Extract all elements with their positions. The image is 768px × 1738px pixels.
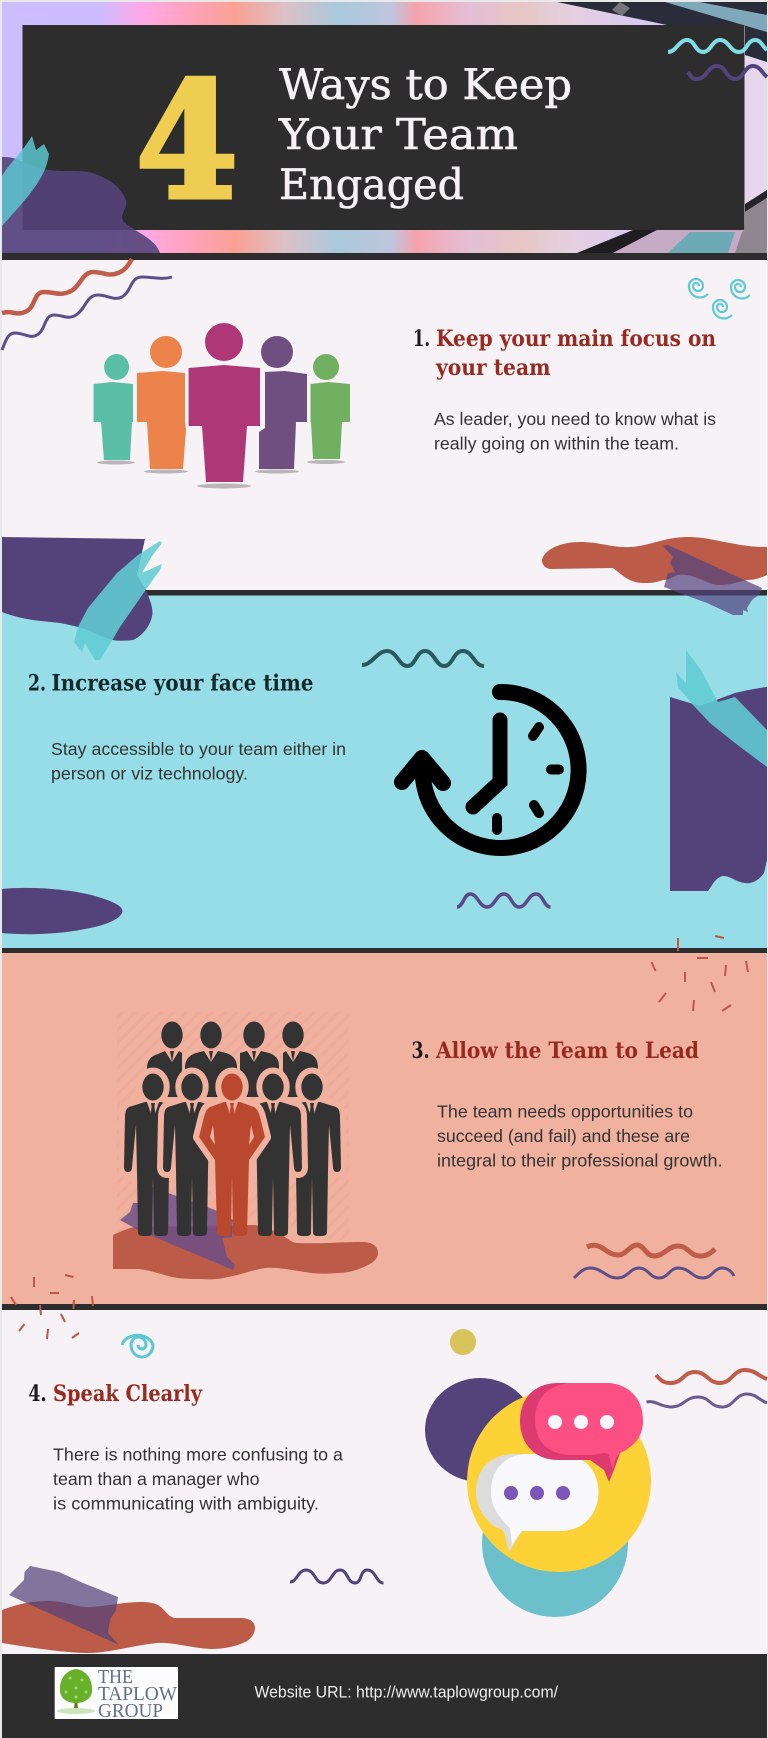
panel: header photo strip: [2, 2, 767, 253]
wave: section 4 purple: [290, 1570, 384, 1583]
bubble: white: [476, 1454, 598, 1552]
front man 4: [244, 1074, 302, 1236]
heading: step 1: 1.: [413, 326, 430, 352]
logo text: GROUP: [98, 1700, 163, 1722]
brush: purple across sections 1-2 right: [663, 545, 762, 615]
icon: tree: [57, 1669, 95, 1714]
panel: section 2 background: [2, 596, 767, 948]
footer background: [2, 1654, 767, 1738]
icon: aqua spirals: [689, 279, 750, 318]
heading: step 1: your team: [435, 355, 550, 381]
circle: yellow: [467, 1390, 651, 1572]
brush: purple bottom left: [9, 1566, 119, 1645]
text: step 4 body: team than a manager who: [53, 1469, 260, 1489]
person: orange: [137, 336, 186, 469]
waves: section 4 right: [646, 1370, 767, 1407]
text: step 1 body: [434, 409, 716, 454]
front man 1: [124, 1068, 170, 1236]
text: step 4 body: There is nothing more confusing to a: [53, 1444, 343, 1464]
heading: step 1: Keep your main focus on: [436, 326, 716, 352]
heading: step 4: Speak Clearly: [53, 1381, 203, 1407]
panel: title background: [22, 25, 744, 230]
text: step 3 body: integral to their professional growth.: [437, 1150, 722, 1170]
logo text: [98, 1666, 177, 1722]
hatch backdrop: [117, 1012, 349, 1240]
icon: team with highlighted leader: [113, 1012, 378, 1279]
text: step 2 body: [51, 739, 346, 784]
text: step 3 body: succeed (and fail) and these are: [437, 1126, 690, 1146]
brush: header teal: [2, 136, 49, 226]
circle: teal: [482, 1469, 628, 1617]
waves: section 3 bottom right: [574, 1245, 734, 1278]
leader in red: [199, 1074, 265, 1236]
decorative dashes: section 3 top right: [652, 936, 748, 1011]
blob: purple across sections 1-2: [2, 537, 153, 641]
divider bars: [2, 253, 767, 1310]
heading: step 1: [413, 326, 716, 381]
text: step 4 body: [53, 1444, 343, 1514]
dot: gold: [450, 1329, 476, 1355]
panel: section 4 background: [2, 1310, 767, 1654]
title: Your Team: [278, 111, 518, 160]
panel: section 1 background: [2, 260, 767, 590]
decorative dashes: section 3/4 boundary: [11, 1275, 93, 1339]
person: green: [310, 354, 350, 459]
person: teal: [94, 354, 133, 460]
front man 5: [295, 1068, 341, 1236]
blob: purple right of section 2: [670, 687, 767, 891]
decorative wave: purple: [688, 66, 767, 79]
text: step 3 body: [437, 1102, 722, 1170]
people shadows: [97, 460, 345, 488]
title: [278, 61, 572, 210]
heading: step 3: 3.: [412, 1038, 430, 1064]
text: website URL: Website URL: http://www.taplowgroup.com/: [254, 1684, 558, 1702]
decorative wave: aqua: [668, 40, 767, 52]
icon: clock with counter-clockwise arrow: [402, 692, 579, 848]
text: step 3 body: The team needs opportunities to: [437, 1102, 693, 1122]
blob: red bottom right of section 1: [542, 537, 767, 585]
logo: The Taplow Group: [55, 1666, 178, 1722]
heading: step 2: 2.: [28, 670, 46, 696]
wave: section 2 purple: [457, 894, 550, 907]
heading number: 4: 4: [136, 47, 238, 235]
icon: team of coloured people: [94, 323, 350, 488]
heading: step 4: 4.: [28, 1381, 46, 1407]
wave: section 2 dark teal: [362, 651, 484, 666]
title: Engaged: [279, 161, 464, 210]
brush: teal right of section 2: [676, 650, 767, 767]
bubble: pink: [520, 1383, 643, 1482]
logo text: THE: [98, 1666, 133, 1688]
blob: purple oval bottom left of section 2: [2, 888, 122, 934]
person: purple: [259, 336, 307, 469]
blob: red under team: [113, 1225, 378, 1279]
text: step 1 body: As leader, you need to know what is: [434, 409, 716, 429]
section 1 waves: [2, 259, 172, 350]
blob: header purple: [2, 157, 160, 253]
heading: step 2: Increase your face time: [52, 670, 314, 696]
circle: purple: [425, 1378, 535, 1482]
text: step 2 body: person or viz technology.: [51, 764, 248, 784]
icon: chat bubbles over circles: [425, 1378, 651, 1617]
panel: section 3 background: [2, 953, 767, 1304]
person: magenta: [189, 323, 260, 482]
text: step 1 body: really going on within the team.: [434, 434, 679, 454]
back row busts: [147, 1022, 318, 1097]
front man 2: [163, 1074, 221, 1236]
title: Ways to Keep: [279, 61, 572, 110]
brush: teal across sections 1-2: [74, 541, 162, 660]
heading: step 3: Allow the Team to Lead: [435, 1038, 699, 1064]
logo text: TAPLOW: [98, 1683, 177, 1705]
text: step 4 body: is communicating with ambiguity.: [53, 1494, 319, 1514]
blob: red bottom left of section 4: [2, 1601, 255, 1653]
text: step 2 body: Stay accessible to your team either in: [51, 739, 346, 759]
icon: spiral section 4: [122, 1335, 153, 1357]
brush: purple under team: [120, 1187, 235, 1270]
